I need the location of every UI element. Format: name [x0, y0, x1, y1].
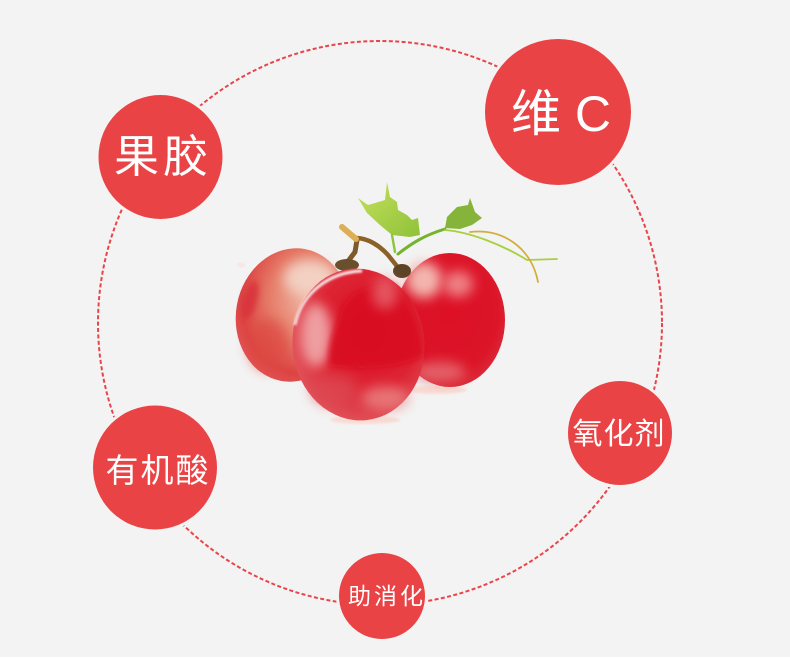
- badge: oxidant: 氧化剂: [572, 418, 666, 451]
- badge: organic acid: 有机酸: [106, 452, 210, 489]
- badge: vitamin C: [482, 36, 634, 188]
- grape: left: [225, 239, 361, 391]
- badge: aids digestion: 助消化: [348, 583, 426, 609]
- badge: pectin: [96, 92, 226, 222]
- leaf: small bud: [445, 198, 482, 229]
- water speck: [237, 262, 245, 268]
- stem: [335, 227, 411, 278]
- grape: front: [285, 262, 432, 427]
- leaf: large: [358, 182, 420, 237]
- dashed orbit ring: [98, 41, 662, 605]
- badge: aids digestion: [336, 550, 428, 642]
- illustration: red grapes with stem and leaves: [225, 182, 557, 427]
- tendril and green stems: [392, 229, 557, 282]
- badge: vitamin C: 维 C: [511, 86, 611, 142]
- badge: pectin: 果胶: [114, 131, 212, 182]
- grape: right: [395, 253, 505, 387]
- badge: organic acid: [90, 402, 220, 532]
- grape shadow: [330, 386, 467, 424]
- badge: oxidant: [565, 378, 675, 488]
